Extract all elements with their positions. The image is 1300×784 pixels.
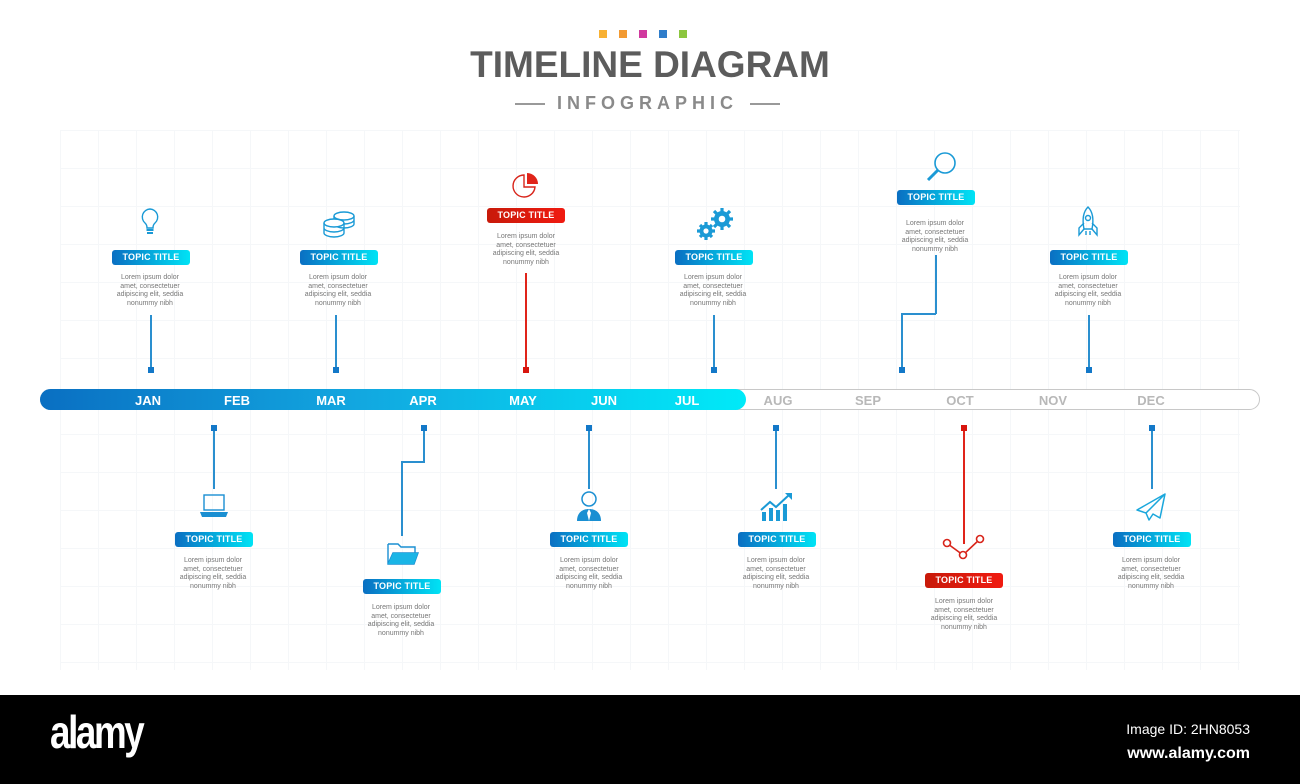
pill [1050,250,1128,265]
text: Lorem ipsum dolor [372,604,430,611]
item: NOV [1050,206,1128,373]
pill [300,250,378,265]
pill: TOPIC TITLE [1060,252,1118,262]
pill [897,190,975,205]
pill [175,532,253,547]
text [368,604,434,637]
text: nonummy nibh [566,583,612,590]
text: amet, consectetuer [559,566,619,573]
text: adipiscing elit, seddia [493,250,559,257]
month labels: MAY [509,393,537,408]
pill [925,573,1003,588]
pill: TOPIC TITLE [122,252,180,262]
text [931,598,998,631]
text: adipiscing elit, seddia [1055,291,1121,298]
text: nonummy nibh [190,583,236,590]
text [902,220,968,253]
month labels: APR [409,393,437,408]
title: TIMELINE DIAGRAM [470,44,830,85]
icon: magnifier [927,152,956,181]
month labels: JUN [591,393,617,408]
text: Lorem ipsum dolor [184,557,242,564]
month labels: NOV [1039,393,1067,408]
text: adipiscing elit, seddia [180,574,246,581]
text: adipiscing elit, seddia [1118,574,1184,581]
image id [1126,717,1250,766]
pill: TOPIC TITLE [185,534,243,544]
month labels: JUL [675,393,699,408]
item: DEC [1113,425,1191,590]
month labels: OCT [946,393,974,408]
text [556,556,622,590]
icon: folder [387,543,419,565]
text: amet, consectetuer [308,283,368,290]
pill: TOPIC TITLE [373,581,431,591]
pill [675,250,753,265]
month labels: MAR [316,393,346,408]
text: nonummy nibh [912,246,958,253]
text: amet, consectetuer [120,283,180,290]
timeline bar [40,389,1260,410]
icon: paper plane [1136,493,1166,521]
text: nonummy nibh [315,300,361,307]
text: Lorem ipsum dolor [1122,557,1180,564]
pill [112,250,190,265]
item: AUG [738,425,816,590]
image id: www.alamy.com [1127,745,1250,762]
pill [738,532,816,547]
icon: bulb [142,208,158,234]
month labels: FEB [224,393,250,408]
item: JAN [112,208,190,373]
text: amet, consectetuer [371,613,431,620]
text: nonummy nibh [1065,300,1111,307]
logo: alamy [50,706,142,758]
text: Lorem ipsum dolor [121,274,179,281]
pill: TOPIC TITLE [1123,534,1181,544]
pill: TOPIC TITLE [935,575,993,585]
item: FEB [175,425,253,590]
text [1118,556,1184,590]
item: MAY [487,173,565,373]
text: amet, consectetuer [905,229,965,236]
month labels: AUG [764,393,792,408]
icon: coins [323,211,355,238]
text: nonummy nibh [378,630,424,637]
pill: TOPIC TITLE [907,192,965,202]
text: nonummy nibh [1128,583,1174,590]
item: OCT [925,425,1003,631]
text: amet, consectetuer [183,566,243,573]
pill [550,532,628,547]
footer bar [0,695,1300,784]
text [180,556,246,590]
text: Lorem ipsum dolor [309,274,367,281]
text [117,274,184,307]
background grid [60,130,1240,670]
icon: rocket [1078,206,1098,237]
pill: TOPIC TITLE [310,252,368,262]
text: nonummy nibh [127,300,173,307]
item: APR [363,425,441,637]
text [743,556,810,590]
text [493,232,560,266]
pill [487,208,565,223]
icon: growth chart [760,493,792,521]
text: adipiscing elit, seddia [931,615,997,622]
text: adipiscing elit, seddia [902,237,968,244]
text: Lorem ipsum dolor [935,598,993,605]
month labels: SEP [855,393,881,408]
text [1055,274,1122,307]
text: Lorem ipsum dolor [684,274,742,281]
text: adipiscing elit, seddia [305,291,371,298]
pill [1113,532,1191,547]
month labels [135,393,1165,408]
text: Lorem ipsum dolor [747,557,805,564]
header color squares [599,30,687,38]
text: nonummy nibh [753,583,799,590]
text: Lorem ipsum dolor [906,220,964,227]
pill: TOPIC TITLE [748,534,806,544]
item: JUN [550,425,628,590]
image id: Image ID: 2HN8053 [1126,721,1250,737]
text: amet, consectetuer [746,566,806,573]
text: amet, consectetuer [1058,283,1118,290]
text [680,274,746,307]
text: Lorem ipsum dolor [497,233,555,240]
item: MAR [300,211,378,373]
text: amet, consectetuer [683,283,743,290]
text: adipiscing elit, seddia [556,574,622,581]
text: adipiscing elit, seddia [368,621,434,628]
text: adipiscing elit, seddia [117,291,183,298]
pill [363,579,441,594]
text: adipiscing elit, seddia [743,574,809,581]
pill: TOPIC TITLE [685,252,743,262]
icon: graph nodes [942,534,984,560]
month labels: JAN [135,393,161,408]
pill: TOPIC TITLE [497,210,555,220]
text: nonummy nibh [690,300,736,307]
month labels: DEC [1137,393,1165,408]
text: nonummy nibh [941,624,987,631]
icon: gears [697,208,733,240]
icon: pie chart [512,173,538,198]
icon: person [577,491,601,521]
text: adipiscing elit, seddia [680,291,746,298]
pill: TOPIC TITLE [560,534,618,544]
text: amet, consectetuer [934,607,994,614]
text [305,274,372,307]
text: amet, consectetuer [496,242,556,249]
item: JUL [675,208,753,373]
text: nonummy nibh [503,259,549,266]
subtitle: INFOGRAPHIC [557,93,738,113]
item: SEP [897,152,975,373]
icon: laptop [200,494,228,517]
text: Lorem ipsum dolor [1059,274,1117,281]
text: Lorem ipsum dolor [560,557,618,564]
text: amet, consectetuer [1121,566,1181,573]
